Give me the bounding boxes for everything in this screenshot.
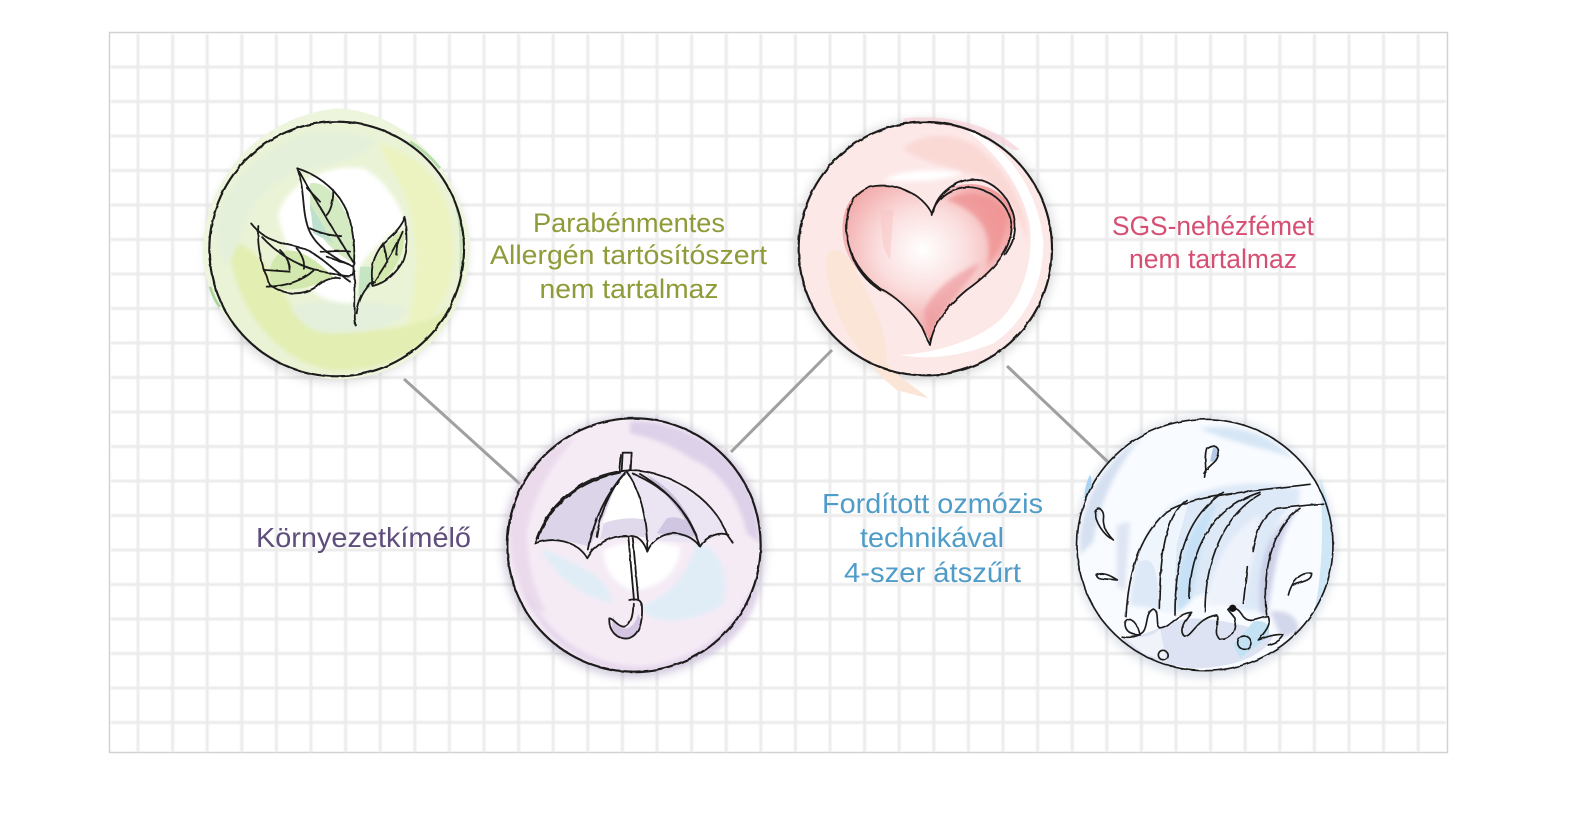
- icon: umbrella circle: [503, 416, 765, 677]
- text: heavy metals: nem tartalmaz: [1129, 244, 1297, 274]
- text: parabens: Allergén tartósítószert: [490, 240, 768, 270]
- text: heavy metals: SGS-nehézfémet: [1112, 211, 1315, 241]
- text: reverse osmosis: technikával: [860, 522, 1004, 553]
- icon: leaf circle: [203, 108, 470, 382]
- text: heavy metals: [1112, 211, 1315, 274]
- text: parabens: [490, 208, 768, 304]
- text: parabens: Parabénmentes: [533, 208, 725, 238]
- text: reverse osmosis: 4-szer átszűrt: [844, 557, 1021, 588]
- text: eco friendly: Környezetkímélő: [256, 522, 471, 553]
- icon: water circle: [1074, 416, 1336, 677]
- connector: umbrella to heart: [731, 350, 832, 452]
- text: reverse osmosis: Fordított ozmózis: [822, 488, 1043, 519]
- panel: grid background: [110, 32, 1448, 752]
- connector: leaf to umbrella: [404, 379, 520, 484]
- icon: heart circle: [795, 117, 1056, 398]
- text: reverse osmosis: [822, 488, 1043, 588]
- text: parabens: nem tartalmaz: [540, 274, 718, 304]
- connector: heart to water: [1007, 366, 1108, 462]
